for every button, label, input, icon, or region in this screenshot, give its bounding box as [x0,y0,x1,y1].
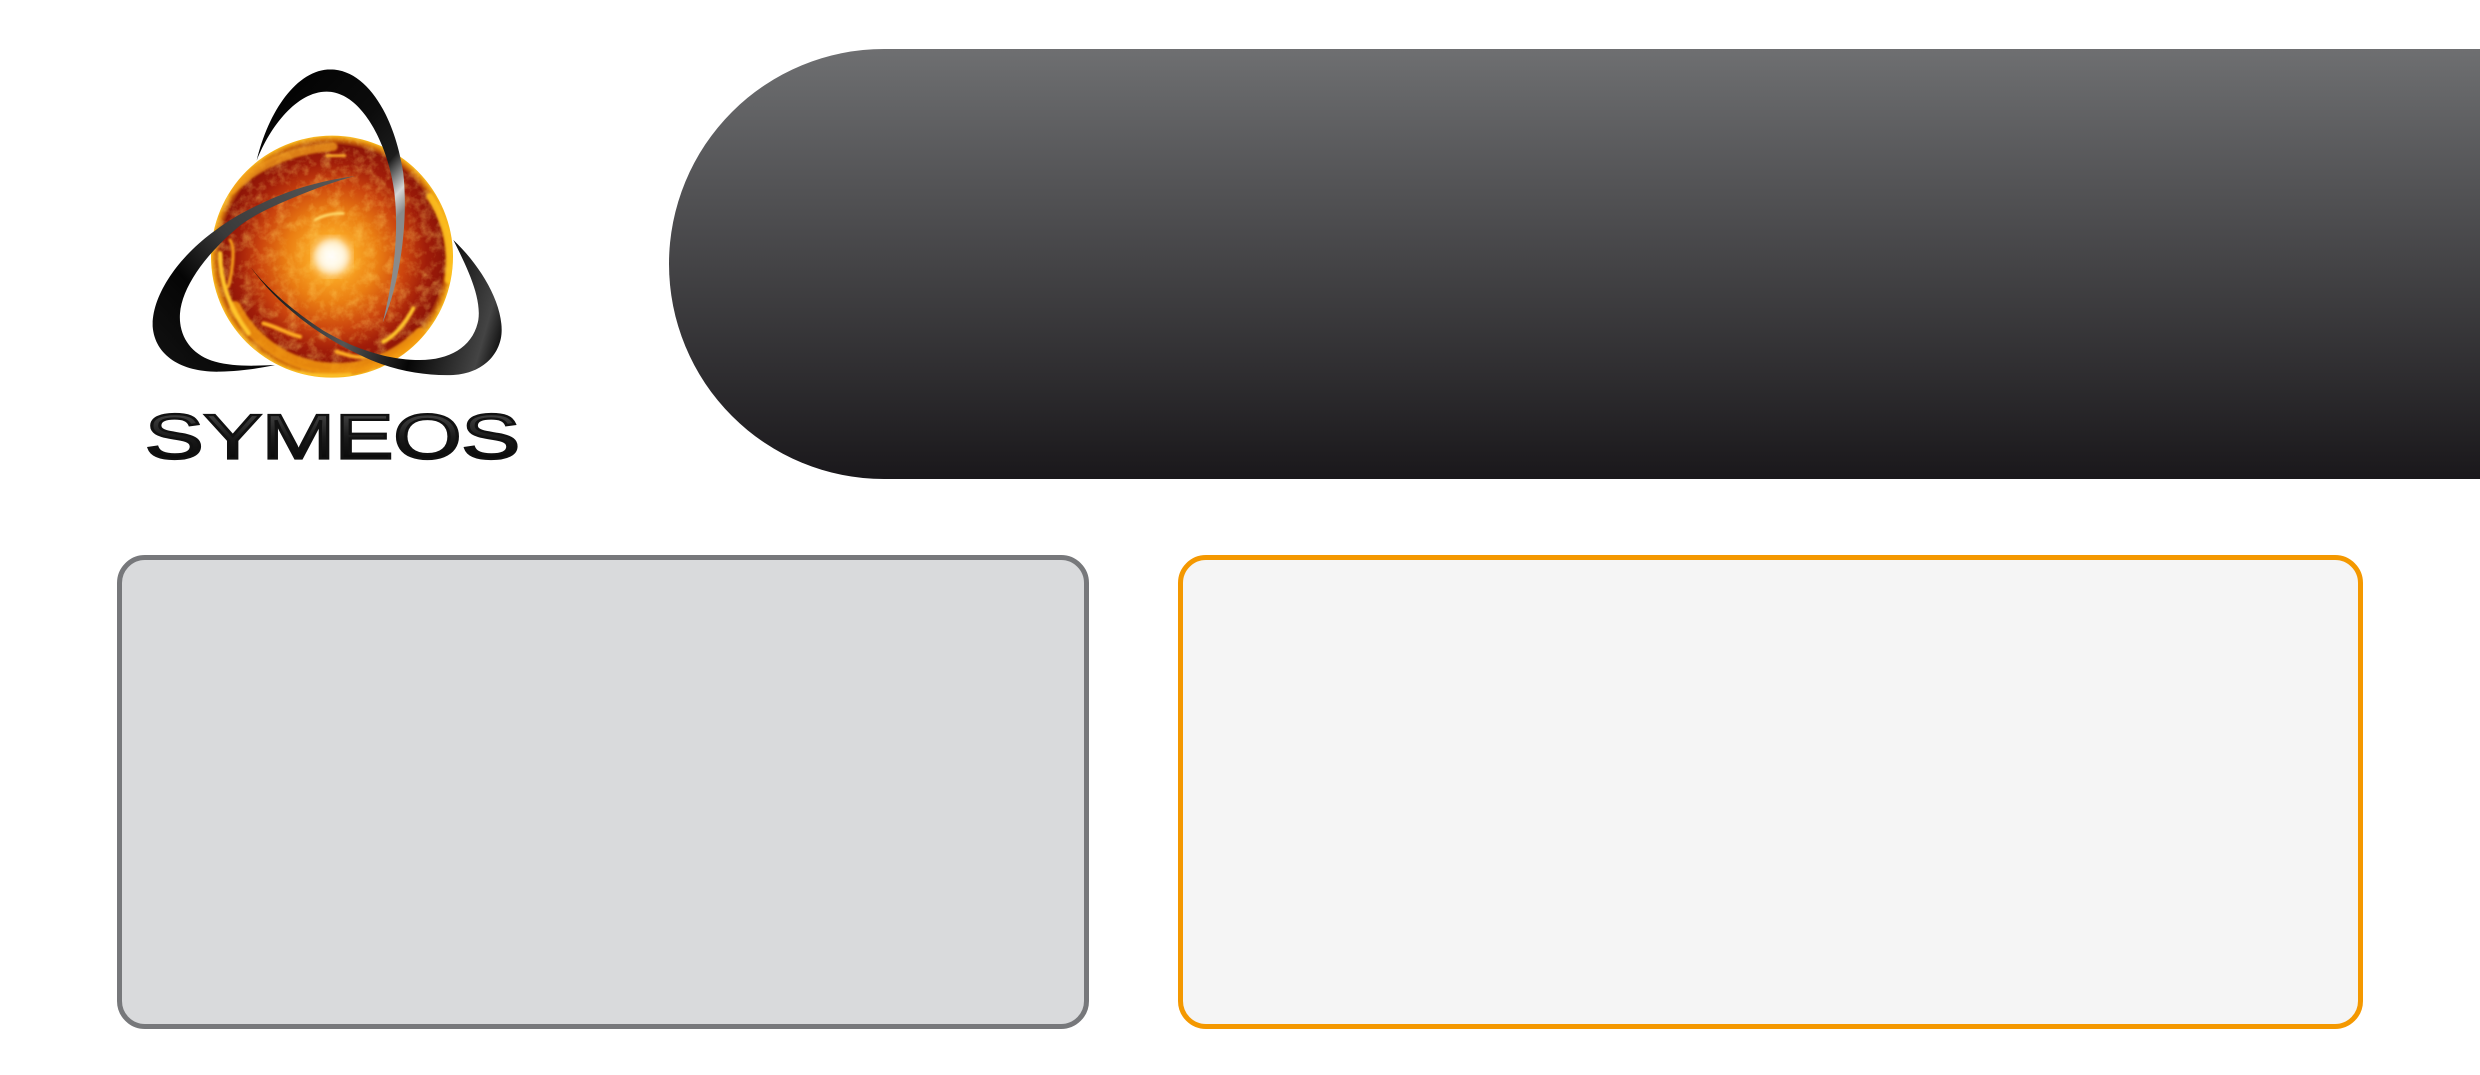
panel: right orange outline [1178,555,2363,1029]
panel: left grey [117,555,1089,1029]
ring: right arc [251,240,502,375]
logo: Symeos sphere with rings and wordmark [145,70,520,472]
ring: top arc [257,69,405,323]
wordmark: SYMEOS: SYMEOS [145,402,520,472]
sphere [210,135,454,378]
header banner [669,49,2480,479]
ring: left arc [153,176,355,372]
